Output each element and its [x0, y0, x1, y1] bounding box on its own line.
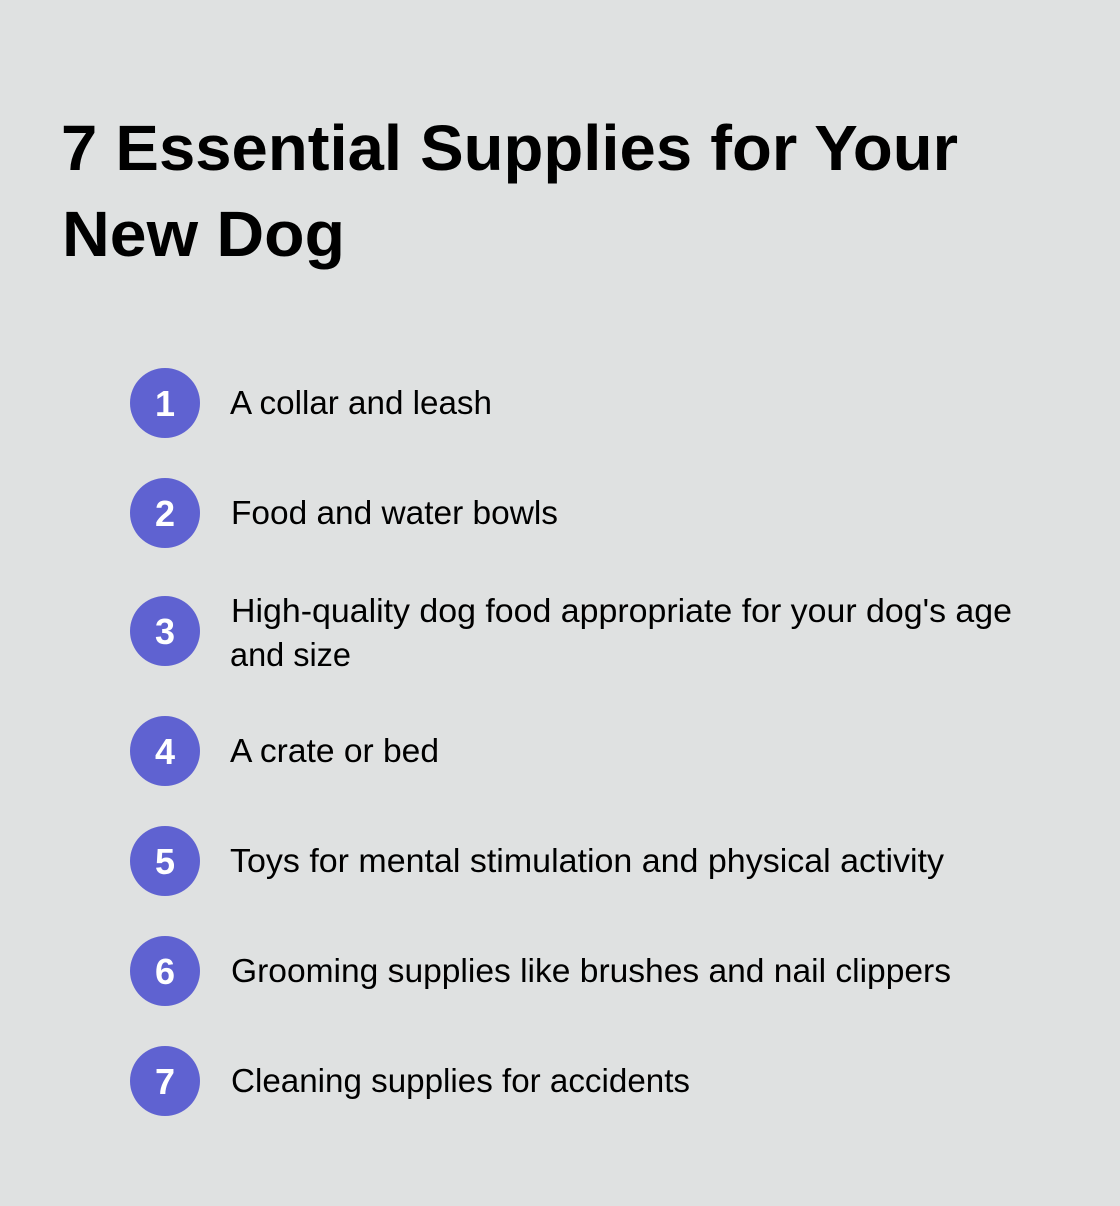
supplies list	[130, 368, 1012, 1116]
item 2: bowls: Food and water bowls	[231, 494, 558, 531]
item 5: toys: Toys for mental stimulation and physical activity	[230, 842, 945, 879]
title: 7 Essential Supplies for Your	[61, 112, 958, 184]
item 3: dog food: 3	[155, 611, 175, 652]
item 7: cleaning	[130, 1046, 690, 1116]
item 4: crate or bed: 4	[155, 731, 175, 772]
item 7: cleaning: 7	[155, 1061, 175, 1102]
title	[61, 112, 958, 270]
title: New Dog	[62, 198, 345, 270]
item 1: collar and leash: 1	[155, 383, 175, 424]
item 5: toys	[130, 826, 945, 896]
item 4: crate or bed	[130, 716, 439, 786]
item 6: grooming: 6	[155, 951, 175, 992]
item 3: dog food: High-quality dog food appropriate for your dog's age	[231, 592, 1012, 629]
item 6: grooming	[130, 936, 951, 1006]
item 7: cleaning: Cleaning supplies for accidents	[231, 1062, 690, 1099]
item 5: toys: 5	[155, 841, 175, 882]
item 3: dog food: and size	[230, 636, 351, 673]
item 1: collar and leash: A collar and leash	[230, 384, 492, 421]
item 4: crate or bed: A crate or bed	[230, 732, 439, 769]
item 2: bowls: 2	[155, 493, 175, 534]
item 1: collar and leash	[130, 368, 492, 438]
item 2: bowls	[130, 478, 558, 548]
item 6: grooming: Grooming supplies like brushes and nail clippers	[231, 952, 951, 989]
item 3: dog food	[130, 592, 1012, 673]
